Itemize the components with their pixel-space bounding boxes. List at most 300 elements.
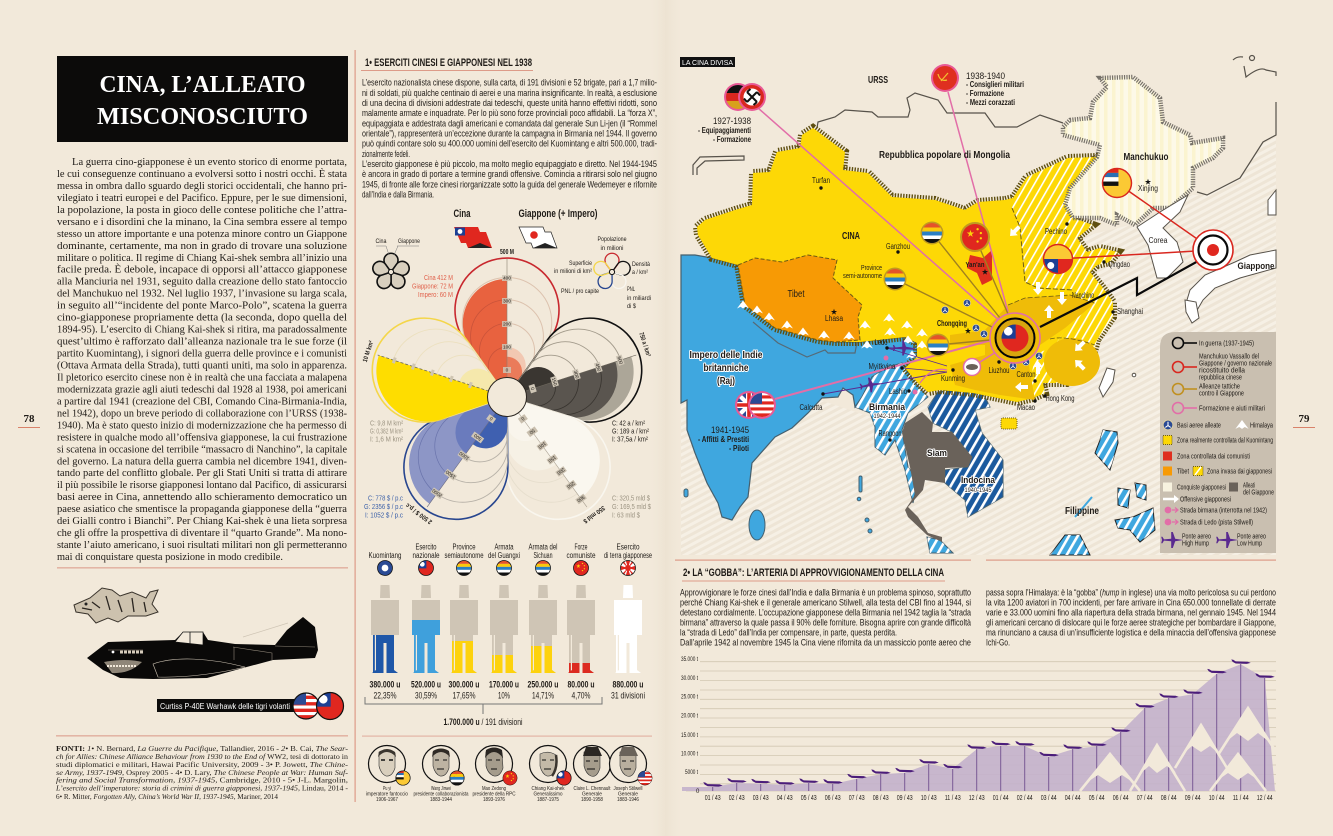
map labels: Liuzhou bbox=[988, 366, 1010, 375]
y axis labels: 30.000 t bbox=[681, 676, 698, 682]
section 1 text: malamente armate e inquadrate. Per lo più sono forze provinciali poco affidabili. La “forza X”, bbox=[362, 108, 657, 119]
map labels: - Formazione bbox=[713, 135, 751, 144]
axis scale values: 500 bbox=[473, 432, 483, 442]
map labels: Tibet bbox=[788, 289, 805, 300]
army column labels: Province bbox=[452, 542, 476, 552]
portrait: Pu Yi: Pu yi bbox=[383, 786, 391, 792]
sources text bbox=[55, 744, 349, 801]
petal value labels: Giappone: 72 M bbox=[412, 282, 453, 290]
legend: alliances: contro il Giappone bbox=[1199, 390, 1244, 398]
Tibet bbox=[738, 255, 862, 342]
portrait: Pu Yi: imperatore fantoccio bbox=[366, 792, 408, 798]
petal: GNP bbox=[507, 402, 611, 520]
legend mini flower: variables: a / km² bbox=[632, 269, 649, 276]
troop numbers: 14,71% bbox=[532, 690, 554, 700]
main article text: messa in ombra dallo sguardo degli storici occidentali, che hanno pri- bbox=[57, 181, 348, 192]
Japanese-invaded zone bbox=[1012, 157, 1118, 398]
legend: zones: Zona invasa dai giapponesi bbox=[1207, 468, 1272, 476]
petal value labels: Cina 412 M bbox=[424, 273, 453, 282]
legend: vassals: Giappone / governo nazionale bbox=[1199, 360, 1272, 368]
India bbox=[681, 255, 917, 520]
main article text: militare o politica. Il regime di Chiang Kai-shek sembra all’inizio una bbox=[57, 253, 347, 264]
army column labels: Armata del bbox=[528, 542, 558, 552]
x axis labels: 10 / 43 bbox=[921, 795, 937, 802]
grid lines bbox=[686, 662, 1276, 791]
Kuomintang controlled zone bbox=[950, 295, 1100, 400]
legend mini flower: variables bbox=[554, 236, 651, 310]
badge: USSR bbox=[931, 64, 959, 92]
map labels: Province bbox=[861, 265, 882, 272]
section 2 text column right: Ichi-Go. bbox=[986, 638, 1010, 649]
army column labels: Esercito bbox=[416, 542, 437, 552]
x axis labels: 01 / 44 bbox=[993, 795, 1009, 802]
map labels: - Formazione bbox=[966, 89, 1004, 98]
aid lines to Chinese hub bbox=[758, 92, 1213, 399]
x axis labels: 12 / 43 bbox=[969, 795, 985, 802]
map labels: Myitkyina bbox=[868, 362, 896, 371]
legend: zones bbox=[1163, 436, 1274, 496]
map labels: Kunming bbox=[941, 374, 965, 383]
petal value labels: G: 0,382 M km² bbox=[370, 426, 403, 436]
axis scale values bbox=[392, 275, 625, 504]
portrait: Chennault: Claire L. Chennault bbox=[574, 786, 611, 792]
section 1 text: L’esercito nazionalista cinese dispone, sulla carta, di 191 divisioni e 52 brigate, pari a 1,7 milio- bbox=[362, 78, 657, 89]
troop numbers: 170.000 u bbox=[489, 680, 519, 690]
section 1 text: ni di soldati, più qualche centinaio di aerei e una marina insignificante. In realtà, a esclusione bbox=[362, 88, 657, 99]
map labels: Canton bbox=[1016, 370, 1036, 379]
petal: population bbox=[455, 258, 559, 397]
troop numbers: 80.000 u bbox=[568, 680, 594, 690]
troop numbers: 22,35% bbox=[374, 690, 396, 700]
x axis labels: 02 / 44 bbox=[1017, 795, 1033, 802]
portrait: Pu Yi bbox=[366, 746, 410, 803]
legend: vassals: Manchukuo Vassallo del bbox=[1199, 354, 1259, 360]
petal value labels: G: 169,5 mld $ bbox=[612, 502, 652, 511]
section 2 text column left bbox=[680, 588, 972, 649]
petal: density bbox=[518, 317, 642, 423]
x axis labels: 04 / 44 bbox=[1065, 795, 1081, 802]
map labels: Lhasa bbox=[825, 314, 843, 323]
main article text: (Ottava Armata della Strada), tutti quanti uniti, ma solo in apparenza. bbox=[57, 360, 347, 372]
area chart: monthly airlift tonnage bbox=[681, 657, 1278, 802]
x axis labels: 10 / 44 bbox=[1209, 795, 1225, 802]
portrait: Mao Zedong: Mao Zedong bbox=[482, 786, 506, 792]
Ledo and Burma roads bbox=[823, 340, 947, 394]
petal value labels: C: 42 a / km² bbox=[612, 418, 645, 428]
petal value labels: G: 2356 $ / p.c bbox=[364, 502, 403, 511]
main article text: del Manchukuo nel 1932. Nel luglio 1937, l’invasione su larga scala, bbox=[57, 289, 347, 300]
x axis labels: 04 / 43 bbox=[777, 795, 793, 802]
axis scale values: 2000 bbox=[431, 487, 444, 498]
axis scale values: 200 bbox=[503, 322, 511, 328]
axis scale values: 300 bbox=[503, 299, 511, 305]
Philippines and Borneo bbox=[1050, 430, 1155, 555]
petal: GNP per capita bbox=[403, 404, 509, 520]
petal value labels: 500 M bbox=[500, 249, 514, 256]
section 1 text: orientale”), rappresenterà un’eccezione durante la campagna in Birmania nel 1944. Il governo bbox=[362, 128, 657, 140]
y axis labels: 0 bbox=[696, 789, 700, 795]
axis scale values: 1500 bbox=[445, 468, 457, 480]
map labels: (Raj) bbox=[717, 376, 735, 387]
page number 78 bbox=[18, 413, 40, 428]
army column labels: Sichuan bbox=[534, 551, 552, 560]
main article text: le cui conseguenze continuano a evolversi sotto i nostri occhi. È stata bbox=[57, 168, 347, 180]
map labels: Birmania bbox=[869, 402, 906, 413]
section 2 text column left: birmana” attraverso la quale passa il 90% delle forniture. Bisogna aprire con grande difficoltà bbox=[680, 618, 972, 629]
legend: alliances: Alleanze tattiche bbox=[1199, 384, 1240, 390]
Hainan bbox=[1001, 418, 1017, 429]
petals bbox=[372, 257, 642, 520]
y axis labels: 5000 t bbox=[685, 770, 698, 776]
troop numbers: 31 divisioni bbox=[611, 690, 645, 700]
legend: Ledo road bbox=[1165, 519, 1253, 526]
Japanese offensive arrows bbox=[1007, 223, 1088, 392]
main article text: che gli offre la prospettiva di diventare il “quarto Grande”. Ma nono- bbox=[57, 528, 348, 539]
section 2 text column left: Approvvigionare le forze cinesi dall’India e dalla Birmania è un problema spinoso, soprattutto bbox=[680, 588, 971, 599]
caption bar with flags bbox=[157, 692, 344, 720]
legend: bases and Himalaya: Himalaya bbox=[1250, 422, 1273, 430]
map labels: Yan'an bbox=[966, 260, 985, 269]
air bases bbox=[941, 299, 1043, 370]
page number 79 bbox=[1293, 413, 1315, 428]
portrait: Pu Yi: 1906-1967 bbox=[376, 797, 398, 803]
troop numbers bbox=[370, 680, 645, 700]
legend: air bridges: Low Hump bbox=[1237, 540, 1262, 548]
map labels: semi-autonome bbox=[843, 273, 882, 280]
legend mini flower: variables: Densità bbox=[632, 261, 650, 268]
legend mini flower: China / Japan: Cina bbox=[376, 238, 387, 245]
map labels: Corea bbox=[1148, 236, 1168, 245]
map labels: Rangoon bbox=[878, 429, 902, 438]
troop numbers: 17,65% bbox=[452, 690, 476, 700]
caption bar with flags: Curtiss P-40E Warhawk delle tigri volanti bbox=[160, 701, 290, 711]
legend: training and aid: Formazione e aiuti militari bbox=[1199, 406, 1265, 412]
map labels: Shanghai bbox=[1117, 307, 1143, 316]
main article text: del governo. La natura della guerra cambia nel dicembre 1941, diven- bbox=[57, 456, 348, 467]
y axis labels: 25.000 t bbox=[681, 694, 698, 700]
map legend bbox=[1160, 332, 1276, 553]
troop numbers: 250.000 u bbox=[528, 680, 558, 690]
y axis labels: 35.000 t bbox=[681, 657, 698, 663]
portrait: Stilwell: Generale bbox=[618, 792, 638, 798]
map labels: 1941-1945 bbox=[711, 425, 749, 436]
petal value labels: C: 778 $ / p.c bbox=[368, 494, 403, 502]
y axis labels: 15.000 t bbox=[681, 733, 698, 739]
x axis labels: 07 / 44 bbox=[1137, 795, 1153, 802]
sources text: L’esercito dell’imperatore: storia di crimini di guerra giapponesi, 1937-1945, Lindau, 2014 - bbox=[55, 784, 349, 793]
soldier: Guangxi bbox=[490, 585, 518, 673]
x axis labels: 05 / 43 bbox=[801, 795, 817, 802]
troop numbers: 380.000 u bbox=[370, 680, 400, 690]
legend: Burma road: Strada birmana (interrotta nel 1942) bbox=[1180, 508, 1267, 514]
petal value labels: I: 63 mld $ bbox=[612, 510, 641, 520]
troop numbers: 10% bbox=[498, 690, 510, 700]
troop numbers: 30,59% bbox=[415, 690, 437, 700]
petal value labels bbox=[362, 249, 652, 525]
x axis labels: 08 / 44 bbox=[1161, 795, 1177, 802]
portrait: Wang Jingwei: presidente collaborazionista bbox=[414, 792, 469, 798]
army column labels: Armata bbox=[494, 542, 514, 552]
map labels: Indocina bbox=[961, 475, 996, 486]
y axis labels bbox=[681, 657, 700, 795]
hub bbox=[488, 378, 526, 416]
section 2 text column left: detestano cordialmente. L’occupazione giapponese della Birmania nel 1942 taglia la “strada bbox=[680, 608, 972, 619]
army column labels: del Guangxi bbox=[488, 551, 520, 560]
x axis labels: 06 / 43 bbox=[825, 795, 841, 802]
troop numbers: 4,70% bbox=[572, 690, 590, 700]
chart headers and flags: Cina bbox=[454, 208, 471, 220]
legend mini flower: variables: Popolazione bbox=[598, 236, 627, 243]
main article text: la popolazione, la posta in gioco delle contese politiche che l’attra- bbox=[57, 205, 348, 216]
chart headers and flags: Giappone (+ Impero) bbox=[518, 208, 598, 220]
portraits of leaders bbox=[366, 746, 652, 803]
area bbox=[682, 664, 1275, 791]
portrait: Chennault: 1890-1958 bbox=[581, 797, 603, 803]
legend: offensives: Offensive giapponesi bbox=[1180, 496, 1231, 504]
main article text: si scatena in occasione del terribile “massacro di Nanchino”, la capitale bbox=[57, 444, 347, 455]
legend: vassals bbox=[1172, 354, 1272, 382]
army column labels bbox=[368, 542, 652, 560]
legend: Ledo road: Strada di Ledo (pista Stilwell) bbox=[1180, 520, 1253, 526]
soldier: Japan bbox=[614, 585, 642, 673]
main article text: in seguito all’“incidente del ponte Marco-Polo”, scatena la guerra bbox=[57, 301, 347, 312]
section 1 text: dall’India e dalla Birmania. bbox=[362, 189, 434, 200]
portrait: Stilwell: Joseph Stilwell bbox=[614, 786, 642, 792]
section 1 text: 1945, di fronte alle forze cinesi riorganizzate sotto la guida del generale Wedemeyer e rifornite bbox=[362, 179, 657, 190]
legend mini flower: China / Japan bbox=[371, 238, 420, 291]
legend: bases and Himalaya bbox=[1163, 420, 1273, 430]
x axis labels: 01 / 43 bbox=[705, 795, 721, 802]
section 2 text column left: perché Chiang Kai-shek e il generale americano Stilwell, alla testa del CBI fino al 1944, si bbox=[680, 598, 971, 609]
legend: bases and Himalaya: Basi aeree alleate bbox=[1177, 422, 1221, 430]
heading: section 2: 2• LA “GOBBA”: L’ARTERIA DI APPROVVIGIONAMENTO DELLA CINA bbox=[683, 567, 944, 579]
legend: air bridges: Ponte aereo bbox=[1182, 534, 1211, 540]
heading: section 1: 1• ESERCITI CINESI E GIAPPONESI NEL 1938 bbox=[365, 57, 532, 69]
total bracket bbox=[365, 697, 602, 727]
axis scale values: 0 bbox=[519, 415, 525, 422]
main article text: dei Gialli contro i Bianchi”. Per Chiang Kai-shek è una lieta sorpresa bbox=[57, 516, 347, 527]
x axis labels: 11 / 44 bbox=[1233, 795, 1249, 802]
portrait: Mao Zedong: presidente della RPC bbox=[472, 792, 516, 798]
sea bbox=[681, 135, 1276, 555]
section 2 text column right: passa sopra l’Himalaya: è la “gobba” (hump in inglese) una via molto pericolosa su cui perdono bbox=[986, 588, 1276, 599]
sources text: se Army, 1937-1949, Osprey 2005 - 4• D. Lary, The Chinese People at War: Human Suf- bbox=[56, 768, 349, 777]
portrait: Chennault bbox=[574, 746, 611, 803]
map labels: - Consiglieri militari bbox=[966, 80, 1024, 89]
Burma bbox=[855, 363, 928, 503]
x axis labels: 09 / 44 bbox=[1185, 795, 1201, 802]
petal value labels: 750 a / km² bbox=[637, 332, 652, 358]
portrait: Mao Zedong: 1893-1976 bbox=[483, 797, 505, 803]
city markers bbox=[819, 179, 1151, 442]
map labels: Hong Kong bbox=[1046, 394, 1074, 403]
Sri Lanka and Indian islands bbox=[684, 476, 872, 540]
legend mini flower: variables: in milioni bbox=[600, 245, 624, 252]
army column labels: Forze bbox=[574, 542, 588, 552]
soldier: Sichuan bbox=[529, 585, 557, 673]
section 1 text bbox=[362, 78, 657, 200]
map labels: Turfan bbox=[812, 176, 830, 185]
map labels: 1927-1938 bbox=[713, 116, 751, 127]
map labels: britanniche bbox=[704, 363, 749, 374]
badge: USA and UK bbox=[735, 391, 776, 419]
map labels: - Affitti & Prestiti bbox=[698, 435, 749, 444]
legend: vassals: ricostituito della bbox=[1199, 368, 1245, 374]
portrait: Chiang Kai-shek bbox=[530, 746, 571, 803]
main article text: quest’ultimo è rafforzato dall’alleanza nazionale tra le sue forze (il bbox=[57, 337, 347, 348]
map labels: Qingdao bbox=[1108, 260, 1130, 269]
main article text: nel 1942), dopo un breve periodo di collaborazione con l’URSS (1938- bbox=[57, 408, 348, 419]
soldier: communists bbox=[567, 585, 595, 673]
soldier: Kuomintang bbox=[371, 585, 399, 673]
y axis labels: 20.000 t bbox=[681, 714, 698, 720]
main article text: modernizzata grazie agli aiuti tedeschi dal 1928 al 1938, poi americani bbox=[57, 384, 347, 395]
sources text: fering and Social Transformation, 1937-1945, Cambridge, 2010 - 5• J-L. Margolin, bbox=[56, 776, 348, 785]
map labels: - Mezzi corazzati bbox=[966, 98, 1015, 107]
y axis labels: 10.000 t bbox=[681, 752, 698, 758]
x axis labels: 07 / 43 bbox=[849, 795, 865, 802]
section 1 text: L’esercito giapponese è più piccolo, ma molto meglio equipaggiato e diretto. Nel 1944-1945 bbox=[362, 159, 657, 170]
map labels: Lashio bbox=[889, 387, 907, 396]
chart headers and flags bbox=[454, 208, 598, 248]
illustration: Curtiss P-40E aircraft bbox=[87, 617, 318, 679]
soldier: provinces bbox=[450, 585, 478, 673]
portrait: Chiang Kai-shek: Chiang Kai-shek bbox=[532, 786, 565, 792]
map labels: Manchukuo bbox=[1124, 152, 1168, 163]
China mainland bbox=[697, 128, 1118, 402]
section 2 text column right bbox=[986, 588, 1276, 649]
map labels: 1938-1940 bbox=[966, 71, 1005, 82]
map labels: Giappone bbox=[1238, 261, 1274, 272]
legend: offensives bbox=[1163, 495, 1231, 504]
page number 78: 78 bbox=[24, 413, 35, 425]
main article text: dominante, certamente, ma non in grado di trovare una soluzione bbox=[57, 241, 347, 252]
portrait: Chiang Kai-shek: Generalissimo bbox=[534, 792, 562, 798]
axis scale values: 1000 bbox=[458, 450, 471, 461]
legend: zones: Zona controllata dai comunisti bbox=[1177, 454, 1250, 460]
Siam bbox=[902, 412, 972, 542]
petal value labels: I: 1,6 M km² bbox=[370, 434, 403, 444]
main article text: 1894-95). L’esercito di Chiang Kai-shek si ritira, ma paradossalmente bbox=[57, 325, 347, 336]
x axis labels: 03 / 44 bbox=[1041, 795, 1057, 802]
map: divided China bbox=[680, 56, 1276, 555]
main article text: partito Kuomintang), i signori della guerra delle province e i comunisti bbox=[57, 348, 347, 360]
axis scale values: 50 bbox=[528, 427, 536, 435]
petal value labels: 2 500 $ / p.c bbox=[404, 501, 434, 525]
Himalaya marks bbox=[737, 300, 928, 358]
axis scale values: 450 bbox=[594, 363, 602, 373]
map labels: Xinjing bbox=[1138, 184, 1158, 193]
legend mini flower: variables: Superficie bbox=[569, 260, 592, 267]
sources text: FONTI: 1• N. Bernard, La Guerre du Pacifique, Tallandier, 2016 - 2• B. Cai, The Sear- bbox=[56, 744, 349, 753]
legend: at war: In guerra (1937-1945) bbox=[1199, 340, 1254, 348]
Yan'an communist zone bbox=[967, 250, 992, 285]
petal value labels: I: 37,5a / km² bbox=[612, 434, 648, 444]
main article text: vilegiato i teatri europei e del Pacifico. Eppure, per le sue dimensioni, bbox=[57, 193, 347, 204]
title box: MISCONOSCIUTO bbox=[97, 104, 308, 130]
portrait: Stilwell bbox=[610, 746, 652, 803]
axis scale values: 100 bbox=[503, 345, 511, 351]
map labels: - Equipaggiamenti bbox=[698, 126, 751, 135]
army column labels: comuniste bbox=[566, 551, 596, 560]
legend: zones: del Giappone bbox=[1243, 490, 1274, 496]
section 1 text: di una decina di divisioni addestrate dai tedeschi, queste unità hanno effettivi ridotti, sono bbox=[362, 98, 657, 109]
main article text: facile preda. È debole, incapace di opporsi all’attacco giapponese bbox=[57, 264, 347, 276]
x axis labels: 12 / 44 bbox=[1257, 795, 1273, 802]
legend: zones: Conquiste giapponesi bbox=[1177, 484, 1226, 492]
main article text: La guerra cino-giapponese è un evento storico di enorme portata, bbox=[72, 157, 347, 168]
axis scale values: 250 bbox=[565, 480, 576, 490]
troop numbers: 880.000 u bbox=[612, 680, 644, 690]
legend: air bridges bbox=[1161, 532, 1266, 548]
x axis labels: 09 / 43 bbox=[897, 795, 913, 802]
map labels: Ledo bbox=[874, 338, 888, 347]
legend mini flower: variables: in miliardi bbox=[627, 295, 651, 302]
petal value labels: C: 320,5 mld $ bbox=[612, 494, 651, 502]
x axis labels bbox=[705, 795, 1273, 802]
petal value labels: 10 M km² bbox=[362, 339, 376, 363]
axis scale values: 150 bbox=[550, 377, 558, 387]
main article text: versano e i disordini che la minano, la Cina sembra essere al tempo bbox=[57, 217, 347, 228]
stems bbox=[713, 664, 1265, 791]
section 2 text column left: la “strada di Ledo” dall’India per compensare, in parte, questa perdita. bbox=[680, 628, 897, 639]
flower chart: China vs Japan comparison bbox=[359, 208, 655, 540]
army column labels: Esercito bbox=[616, 542, 640, 552]
section 1 text: equipaggiata e addestrata dagli americani e comandata dal generale Sun Li-jen (il “Rommel bbox=[362, 118, 657, 129]
petal value labels: G: 189 a / km² bbox=[612, 426, 649, 436]
axis scale values: 300 bbox=[572, 370, 580, 380]
legend: zones: Zona realmente controllata dal Kuomintang bbox=[1177, 438, 1273, 444]
legend: air bridges: Ponte aereo bbox=[1237, 534, 1266, 540]
main article text: alla Manciuria nel 1931, seguito dalla creazione dello stato fantoccio bbox=[57, 277, 347, 288]
section 2 text column left: Dall’aprile 1942 al novembre 1945 la Cina viene rifornita da un massiccio ponte aereo che bbox=[680, 638, 971, 649]
map labels: Siam bbox=[927, 448, 947, 459]
petal value labels: C: 9,8 M km² bbox=[370, 418, 403, 428]
section 1 text: zionalmente fedeli. bbox=[362, 149, 410, 160]
petal value labels: 350 mld $ bbox=[581, 504, 606, 525]
portrait: Stilwell: 1883-1946 bbox=[617, 797, 639, 803]
army column labels: nazionale bbox=[412, 551, 440, 560]
section 1 text: può quindi contare solo su 400.000 uomini dell’esercito del Kuomintang e altri 500.000, tradi- bbox=[362, 139, 657, 150]
main article text: a partire dal 1941 (creazione del CBI, Comando Cina-Birmania-India, bbox=[57, 396, 347, 407]
badge: Japan bbox=[1193, 230, 1233, 270]
legend: zones: Alleati bbox=[1243, 482, 1255, 490]
main article text: Il pletorico esercito cinese non è in realtà che una facciata a malapena bbox=[57, 372, 347, 384]
soldiers chart: armies bbox=[365, 542, 652, 727]
x axis labels: 02 / 43 bbox=[729, 795, 745, 802]
sources text: 6• R. Mitter, Forgotten Ally, China’s World War II, 1937-1945, Mariner, 2014 bbox=[56, 792, 278, 801]
legend mini flower: variables: in milioni di km² bbox=[554, 268, 593, 275]
army column labels: semiautonome bbox=[444, 551, 484, 560]
legend: training and aid bbox=[1172, 402, 1265, 414]
sources text: ch for Allies: Chinese Alliance Behaviour from 1930 to the End of WW2, tesi di dottorato in bbox=[56, 752, 348, 761]
legend: air bridges: High Hump bbox=[1182, 540, 1209, 548]
map labels: - Piloti bbox=[729, 444, 749, 453]
plane markers bbox=[703, 660, 1275, 787]
title box bbox=[57, 56, 348, 142]
portrait: Wang Jingwei: Wang Jinwei bbox=[431, 786, 451, 792]
axis scale values: 150 bbox=[547, 454, 557, 464]
legend mini flower: variables: PNL bbox=[627, 286, 635, 293]
troop numbers: 520.000 u bbox=[411, 680, 441, 690]
axis scale values: 0 bbox=[506, 368, 509, 374]
petal value labels: I: 1052 $ / p.c bbox=[365, 510, 403, 520]
axis scale values: 0 bbox=[488, 415, 494, 421]
portrait: Chiang Kai-shek: 1887-1975 bbox=[537, 797, 559, 803]
map labels: 1940-1945 bbox=[964, 488, 992, 494]
map labels: CINA bbox=[842, 231, 860, 242]
army badges bbox=[378, 560, 636, 576]
